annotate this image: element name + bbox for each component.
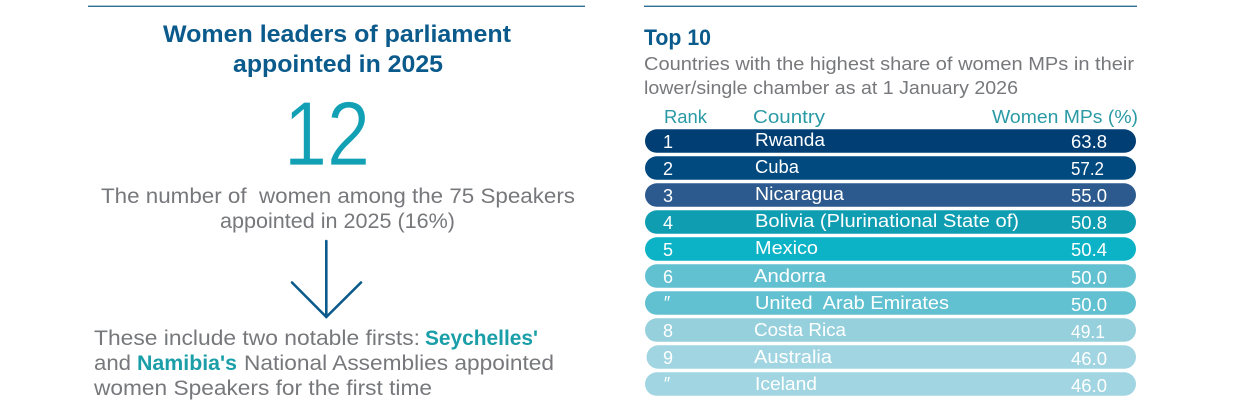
text block: number of women: The number of women among the 75 Speakers (101, 184, 575, 208)
row 7: United Arab Emirates: 50.0 (1071, 295, 1107, 315)
row 3: Nicaragua (645, 183, 1136, 207)
row 5: Mexico: Mexico (755, 238, 818, 258)
table header: Country (753, 106, 826, 127)
text block: subtitle (644, 53, 1134, 98)
row 1: Rwanda (645, 129, 1136, 153)
row 3: Nicaragua: 3 (663, 186, 673, 206)
row 9: Australia (646, 345, 1136, 369)
row 6: Andorra: 6 (663, 267, 673, 287)
row 2: Cuba: 57.2 (1071, 159, 1104, 179)
table header: Women MPs (%) (992, 106, 1138, 127)
icon: down arrow (292, 241, 361, 317)
row 5: Mexico (645, 237, 1136, 261)
text block: notable firsts: Namibia's (137, 352, 237, 375)
heading: women leaders: Women leaders of parliament (163, 21, 511, 48)
text block: number of women: appointed in 2025 (16%) (220, 209, 455, 233)
row 5: Mexico: 50.4 (1071, 240, 1107, 260)
row 9: Australia: Australia (754, 347, 833, 367)
row 4: Bolivia: 50.8 (1071, 213, 1107, 233)
text block: notable firsts (93, 326, 554, 400)
heading: top 10: Top 10 (644, 25, 711, 50)
row 9: Australia: 9 (663, 348, 673, 368)
row 7: United Arab Emirates: United Arab Emirates (755, 293, 949, 313)
row 8: Costa Rica: Costa Rica (754, 320, 847, 340)
row 4: Bolivia: 4 (663, 213, 673, 233)
row 3: Nicaragua: 55.0 (1071, 186, 1107, 206)
row 6: Andorra: Andorra (754, 266, 827, 286)
text block: number of women (101, 184, 575, 233)
row 5: Mexico: 5 (663, 240, 673, 260)
row 4: Bolivia: Bolivia (Plurinational State of) (755, 211, 1019, 231)
row 1: Rwanda: 63.8 (1071, 132, 1107, 152)
heading: women leaders (163, 21, 511, 78)
row 10: Iceland (645, 372, 1136, 396)
row 2: Cuba (645, 156, 1136, 180)
row 7: United Arab Emirates: ″ (663, 293, 670, 313)
row 4: Bolivia (645, 210, 1136, 234)
row 2: Cuba: Cuba (755, 157, 800, 177)
heading: women leaders: appointed in 2025 (233, 51, 443, 78)
row 2: Cuba: 2 (663, 159, 673, 179)
row 10: Iceland: 46.0 (1071, 376, 1107, 396)
text block: notable firsts: Seychelles' (425, 327, 538, 350)
text block: notable firsts: women Speakers for the first time (93, 376, 432, 400)
text block: notable firsts: National Assemblies appointed (244, 351, 554, 375)
row 10: Iceland: Iceland (755, 374, 817, 394)
row 10: Iceland: ″ (663, 374, 670, 394)
row 9: Australia: 46.0 (1071, 349, 1107, 369)
text block: notable firsts: These include two notable firsts: (94, 326, 420, 350)
row 8: Costa Rica (645, 318, 1136, 342)
big number 12: 12 (284, 84, 370, 185)
row 8: Costa Rica: 8 (663, 321, 673, 341)
text block: notable firsts: and (94, 351, 131, 375)
row 1: Rwanda: Rwanda (755, 130, 826, 150)
panel: women leaders of parliament (93, 21, 575, 400)
table header: Rank (664, 106, 708, 127)
row 8: Costa Rica: 49.1 (1071, 322, 1105, 342)
row 3: Nicaragua: Nicaragua (755, 184, 845, 204)
table header (664, 106, 1138, 127)
text block: subtitle: lower/single chamber as at 1 January 2026 (644, 77, 1018, 98)
text block: subtitle: Countries with the highest share of women MPs in their (644, 53, 1134, 74)
row 1: Rwanda: 1 (663, 132, 673, 152)
row 6: Andorra (645, 264, 1136, 288)
row 7: United Arab Emirates (645, 291, 1136, 315)
row 6: Andorra: 50.0 (1071, 268, 1107, 288)
panel: top 10 (644, 25, 1138, 396)
